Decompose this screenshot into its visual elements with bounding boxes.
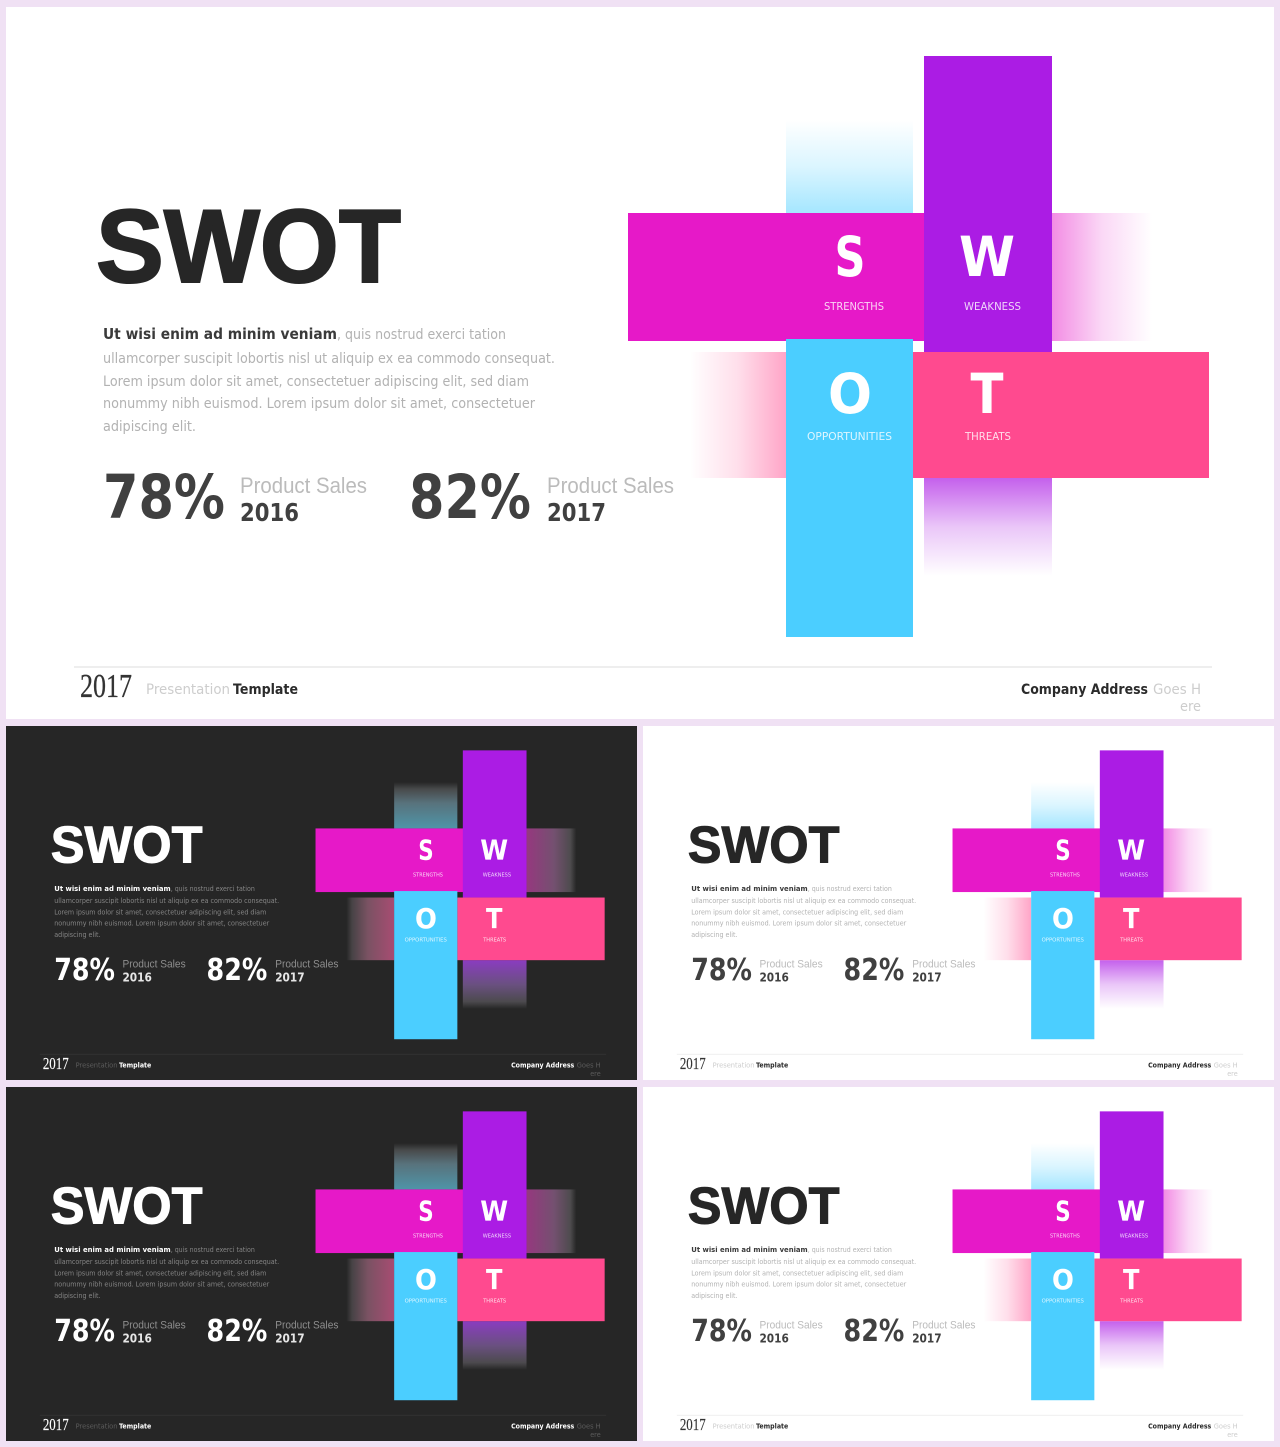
panel: light SWOT slide, upper right [643,726,1274,1080]
band: opportunities: O [415,904,437,935]
band: strengths [316,828,463,892]
footer: 2017 [680,1054,706,1073]
text block: description [54,884,279,939]
band: opportunities: OPPORTUNITIES [1042,1298,1084,1304]
stat: 82% product sales 2017: 82% [844,953,904,988]
band: weakness: WEAKNESS [1120,1234,1149,1240]
band: weakness: W [959,225,1015,289]
band: opportunities: O [415,1265,437,1296]
footer: Company Address [1148,1423,1211,1431]
stat: 82% product sales 2017 [207,953,339,988]
band: opportunities [1031,1252,1094,1400]
text block: description: nonummy nibh euismod. Lorem ipsum dolor sit amet, consectetuer [54,1280,269,1288]
band: strengths: S [418,1197,434,1228]
band: threats [457,1259,605,1321]
stat: 78% product sales 2016: Product Sales [122,1320,186,1332]
band: opportunities [1031,891,1094,1039]
footer: Template [119,1062,152,1070]
title: SWOT [688,816,840,874]
text block: description: ullamcorper suscipit lobortis nisl ut aliquip ex ea commodo consequat. [54,897,279,905]
band: opportunities [394,1252,457,1400]
text block: description: adipiscing elit. [691,1292,738,1300]
footer: Presentation [76,1062,117,1070]
text block: description: Lorem ipsum dolor sit amet, consectetuer adipiscing elit, sed diam [691,1269,903,1277]
footer [74,667,1212,715]
footer: Company Address [511,1062,574,1070]
band: strengths [953,1189,1100,1253]
title: SWOT [96,189,401,305]
stat: 78% product sales 2016 [54,953,186,988]
footer: Goes H [577,1062,601,1070]
band: threats: T [486,1265,503,1296]
stat: 78% product sales 2016 [691,953,823,988]
stat: 82% product sales 2017: 2017 [275,1331,305,1346]
stat: 82% product sales 2017 [844,1314,976,1349]
footer: 2017 [43,1415,69,1434]
footer: 2017 [680,1415,706,1434]
text block: description: , quis nostrud exerci tation [808,1246,892,1254]
band: opportunities: O [1052,1265,1074,1296]
band: opportunities [786,339,913,637]
stat: 78% product sales 2016 [691,1314,823,1349]
text block: description: , quis nostrud exerci tation [337,327,506,343]
band: threats: THREATS [1119,1298,1144,1304]
text block: description: adipiscing elit. [103,419,196,435]
footer: Template [756,1423,789,1431]
band: weakness: W [1117,1197,1145,1228]
stat: 78% product sales 2016: 78% [103,462,225,533]
band: opportunities: O [828,362,872,426]
text block: description [691,884,916,939]
footer [677,1054,1243,1078]
band: threats: THREATS [1119,937,1144,943]
band: strengths: S [1055,1197,1071,1228]
stat: 82% product sales 2017: Product Sales [547,473,674,498]
band: threats [1094,898,1242,960]
SWOT cross diagram [316,750,605,1039]
stat: 78% product sales 2016: Product Sales [240,473,367,498]
stat: 78% product sales 2016: 2016 [240,498,299,527]
stat: 78% product sales 2016: Product Sales [122,959,186,971]
band: threats [457,898,605,960]
stat: 82% product sales 2017: 2017 [547,498,606,527]
footer: 2017 [43,1054,69,1073]
stat: 78% product sales 2016: 78% [691,1314,752,1349]
stat: 78% product sales 2016: 78% [54,1314,115,1349]
band: opportunities: O [1052,904,1074,935]
text block: description: Ut wisi enim ad minim veniam [54,1245,171,1254]
band: weakness [1100,750,1164,898]
band: strengths: STRENGTHS [1050,1234,1080,1240]
footer: 2017 [80,668,132,705]
stat: 82% product sales 2017 [409,462,674,533]
stat: 82% product sales 2017: 82% [844,1314,904,1349]
text block: description: nonummy nibh euismod. Lorem ipsum dolor sit amet, consectetuer [54,919,269,927]
stat: 78% product sales 2016: Product Sales [759,959,823,971]
band: weakness: WEAKNESS [483,1234,512,1240]
stat: 82% product sales 2017: Product Sales [275,1320,339,1332]
band: threats: THREATS [964,430,1011,443]
footer: Presentation [713,1423,754,1431]
band: strengths: S [834,225,866,289]
band: weakness: W [480,1197,508,1228]
band: opportunities: OPPORTUNITIES [405,937,447,943]
band: threats [1094,1259,1242,1321]
band: weakness [1100,1111,1164,1259]
band: opportunities [394,891,457,1039]
footer: Goes H [1214,1062,1238,1070]
footer: Company Address [1148,1062,1211,1070]
band: threats: T [1123,1265,1140,1296]
band: strengths [316,1189,463,1253]
footer [40,1054,606,1078]
footer: Presentation [146,682,230,698]
band: weakness: WEAKNESS [1120,873,1149,879]
stat: 82% product sales 2017: 2017 [912,1331,942,1346]
footer: Template [756,1062,789,1070]
band: weakness: WEAKNESS [964,300,1021,313]
stat: 82% product sales 2017 [844,953,976,988]
band: weakness: W [480,836,508,867]
band: strengths: STRENGTHS [413,873,443,879]
text block: description: Lorem ipsum dolor sit amet, consectetuer adipiscing elit, sed diam [691,908,903,916]
text block: description: , quis nostrud exerci tation [171,885,255,893]
band: strengths: STRENGTHS [413,1234,443,1240]
text block: description: Lorem ipsum dolor sit amet, consectetuer adipiscing elit, sed diam [103,374,529,390]
stat: 78% product sales 2016: 2016 [122,970,152,985]
footer: Goes H [1214,1423,1238,1431]
panel: light SWOT slide, lower right [643,1087,1274,1441]
text block: description: ullamcorper suscipit lobortis nisl ut aliquip ex ea commodo consequat. [691,897,916,905]
band: strengths: S [418,836,434,867]
band: threats: T [486,904,503,935]
stat: 82% product sales 2017: 2017 [275,970,305,985]
stat: 78% product sales 2016 [103,462,367,533]
stat: 82% product sales 2017: 82% [409,462,531,533]
footer: Template [119,1423,152,1431]
text block: description: adipiscing elit. [691,931,738,939]
text block: description: ullamcorper suscipit lobortis nisl ut aliquip ex ea commodo consequat. [103,351,555,367]
text block: description: nonummy nibh euismod. Lorem ipsum dolor sit amet, consectetuer [103,396,535,412]
text block: description: Lorem ipsum dolor sit amet, consectetuer adipiscing elit, sed diam [54,908,266,916]
band: threats [913,352,1209,478]
footer: ere [590,1070,601,1078]
text block: description: nonummy nibh euismod. Lorem ipsum dolor sit amet, consectetuer [691,919,906,927]
SWOT cross diagram [316,1111,605,1400]
panel: dark SWOT slide, lower left [6,1087,637,1441]
text block: description: Ut wisi enim ad minim veniam [691,884,808,893]
footer [40,1415,606,1439]
stat: 78% product sales 2016: 2016 [759,1331,789,1346]
stat: 78% product sales 2016: 78% [54,953,115,988]
stat: 78% product sales 2016: Product Sales [759,1320,823,1332]
band: threats: THREATS [482,937,507,943]
stat: 82% product sales 2017: 82% [207,953,267,988]
stat: 82% product sales 2017 [207,1314,339,1349]
text block: description [103,325,555,435]
band: weakness [924,56,1052,352]
band: threats: THREATS [482,1298,507,1304]
panel: dark SWOT slide, upper left [6,726,637,1080]
stat: 82% product sales 2017: 82% [207,1314,267,1349]
text block: description: adipiscing elit. [54,1292,101,1300]
text block: description: ullamcorper suscipit lobortis nisl ut aliquip ex ea commodo consequat. [54,1258,279,1266]
text block: description: Lorem ipsum dolor sit amet, consectetuer adipiscing elit, sed diam [54,1269,266,1277]
footer: Goes H [577,1423,601,1431]
text block: description: Ut wisi enim ad minim veniam [103,325,337,343]
text block: description: , quis nostrud exerci tation [171,1246,255,1254]
panel: large light SWOT slide [6,7,1274,719]
SWOT cross diagram [953,1111,1242,1400]
text block: description: Ut wisi enim ad minim veniam [54,884,171,893]
band: opportunities: OPPORTUNITIES [405,1298,447,1304]
band: strengths: STRENGTHS [824,300,884,313]
stat: 82% product sales 2017: Product Sales [275,959,339,971]
band: strengths [628,213,925,341]
band: threats: T [1123,904,1140,935]
SWOT cross diagram [953,750,1242,1039]
footer [677,1415,1243,1439]
title: SWOT [688,1177,840,1235]
stat: 78% product sales 2016 [54,1314,186,1349]
band: opportunities: OPPORTUNITIES [1042,937,1084,943]
footer: ere [1227,1070,1238,1078]
stat: 82% product sales 2017: 2017 [912,970,942,985]
footer: ere [1227,1431,1238,1439]
text block: description [54,1245,279,1300]
text block: description: Ut wisi enim ad minim veniam [691,1245,808,1254]
footer: Company Address [1021,682,1148,698]
text block: description: ullamcorper suscipit lobortis nisl ut aliquip ex ea commodo consequat. [691,1258,916,1266]
SWOT cross diagram [628,56,1209,637]
text block: description: adipiscing elit. [54,931,101,939]
title: SWOT [51,816,203,874]
band: weakness: W [1117,836,1145,867]
band: opportunities: OPPORTUNITIES [807,430,892,443]
footer: Template [233,682,298,698]
footer: Company Address [511,1423,574,1431]
band: threats: T [970,362,1004,426]
footer: Presentation [713,1062,754,1070]
stat: 78% product sales 2016: 2016 [759,970,789,985]
stat: 78% product sales 2016: 78% [691,953,752,988]
stat: 82% product sales 2017: Product Sales [912,1320,976,1332]
footer: ere [590,1431,601,1439]
title: SWOT [51,1177,203,1235]
band: weakness [463,1111,527,1259]
stat: 82% product sales 2017: Product Sales [912,959,976,971]
band: weakness: WEAKNESS [483,873,512,879]
band: strengths: S [1055,836,1071,867]
text block: description: , quis nostrud exerci tation [808,885,892,893]
footer: ere [1180,699,1201,715]
band: weakness [463,750,527,898]
stat: 78% product sales 2016: 2016 [122,1331,152,1346]
footer: Presentation [76,1423,117,1431]
band: strengths [953,828,1100,892]
band: strengths: STRENGTHS [1050,873,1080,879]
text block: description [691,1245,916,1300]
text block: description: nonummy nibh euismod. Lorem ipsum dolor sit amet, consectetuer [691,1280,906,1288]
footer: Goes H [1153,682,1201,698]
